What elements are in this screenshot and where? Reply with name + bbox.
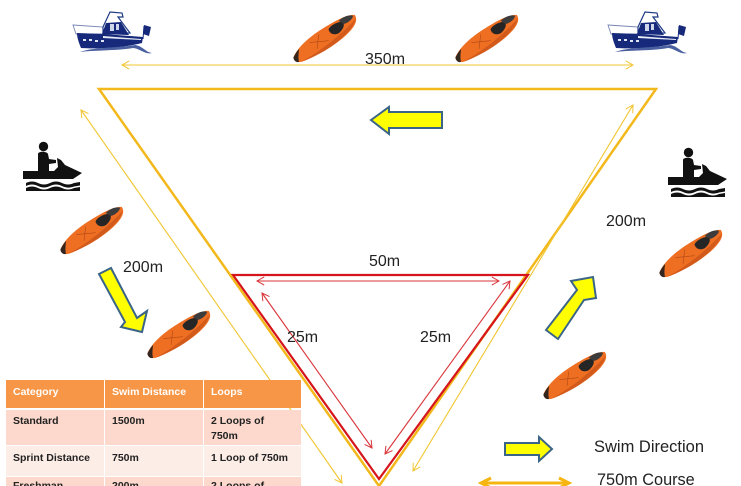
swim direction arrow: top (371, 107, 442, 134)
table row: standard: 2 Loops of (211, 415, 265, 427)
table: categories (6, 380, 301, 486)
label: 50m: 50m (369, 253, 400, 270)
label: 25m right: 25m (420, 329, 451, 346)
icon: kayak left lower (141, 308, 217, 361)
dimension arrow: 200m left side (81, 110, 342, 483)
dimension arrow: 200m right side (413, 105, 633, 471)
table header row: Category (13, 386, 59, 398)
icon: boat left (73, 12, 152, 53)
label: 200m right: 200m (606, 213, 646, 230)
icon: kayak right lower (537, 349, 613, 402)
table row: standard: Standard (13, 415, 59, 427)
table row: standard: 750m (211, 430, 238, 442)
legend: 750m course arrow (481, 478, 569, 486)
label: 350m: 350m (365, 51, 405, 68)
table header row: Loops (211, 386, 243, 398)
table row: sprint distance (6, 446, 301, 476)
table row: standard (6, 410, 301, 445)
swim direction arrow: left side (99, 268, 147, 332)
icon: boat right (608, 12, 687, 53)
table row: standard: 1500m (112, 415, 145, 427)
icon: jet ski right (668, 148, 727, 197)
table row: sprint distance: 750m (112, 452, 139, 464)
icon: kayak top right (449, 12, 525, 65)
course triangle: 750m yellow (99, 89, 656, 486)
icon: kayak left upper (54, 204, 130, 257)
table header row (6, 380, 301, 408)
swim direction arrow: right side (546, 277, 596, 339)
icon: kayak right upper (653, 227, 729, 280)
table row: sprint distance: Sprint Distance (13, 452, 90, 464)
course triangle: inner red (233, 275, 528, 479)
dimension arrow: 50m (257, 280, 499, 282)
table row: freshman (6, 477, 301, 486)
icon: kayak top left (287, 12, 363, 65)
dimension arrow: 25m left (262, 293, 372, 448)
dimension arrow: 25m right (385, 281, 510, 454)
legend: swim direction arrow (505, 437, 552, 461)
label: 25m left: 25m (287, 329, 318, 346)
icon: jet ski left (23, 142, 82, 191)
dimension arrow: 350m top side (122, 64, 633, 66)
table header row: Swim Distance (112, 386, 186, 398)
legend: swim direction label: Swim Direction (594, 438, 704, 456)
label: 200m left: 200m (123, 259, 163, 276)
table row: sprint distance: 1 Loop of 750m (211, 452, 288, 464)
